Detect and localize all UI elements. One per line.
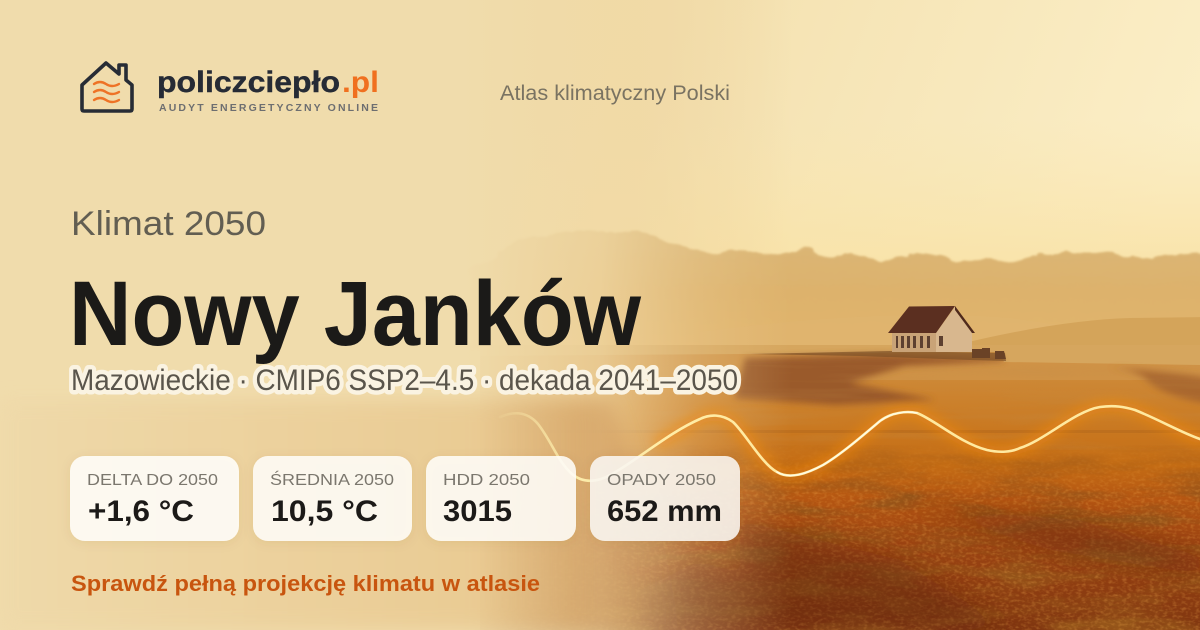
- card: delta: +1,6 °C: [88, 495, 194, 528]
- header label: Atlas klimatyczny Polski: [500, 82, 730, 105]
- logo: [82, 63, 379, 114]
- subtitle: Mazowieckie · CMIP6 SSP2–4.5 · dekada 2041–2050: [71, 364, 738, 397]
- call to action: Sprawdź pełną projekcję klimatu w atlasie: [71, 571, 540, 596]
- eyebrow: Klimat 2050: [71, 205, 266, 243]
- logo wordmark: policzciepło: [157, 66, 340, 99]
- card: HDD: 3015: [443, 495, 512, 528]
- card: HDD: HDD 2050: [443, 472, 530, 489]
- card: average: [253, 456, 412, 541]
- card: average: 10,5 °C: [271, 495, 378, 528]
- card: precipitation: OPADY 2050: [607, 472, 716, 489]
- stat cards: [70, 456, 740, 541]
- card: precipitation: [590, 456, 740, 541]
- card: delta: DELTA DO 2050: [87, 472, 218, 489]
- logo domain: .pl: [342, 66, 379, 99]
- card: HDD: [426, 456, 576, 541]
- card: delta: [70, 456, 239, 541]
- glowing temperature line: [500, 406, 1200, 481]
- illustration: house: [750, 306, 1006, 361]
- icon: house with heat waves: [82, 63, 132, 111]
- title: Nowy Janków: [69, 263, 641, 365]
- card: average: ŚREDNIA 2050: [270, 470, 394, 489]
- card: precipitation: 652 mm: [607, 495, 722, 528]
- logo tagline: AUDYT ENERGETYCZNY ONLINE: [159, 102, 378, 114]
